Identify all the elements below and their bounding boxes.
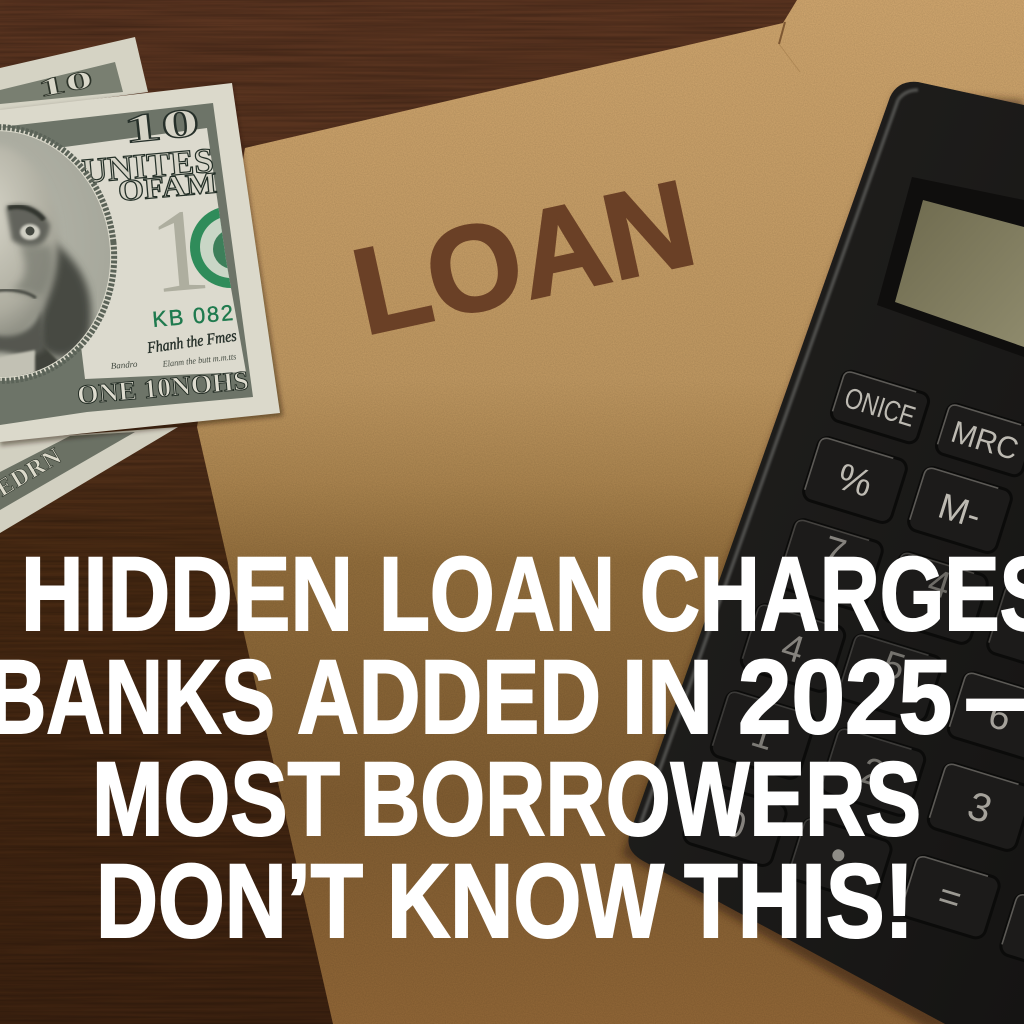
small print: Bandro [110,359,138,371]
hair [36,240,91,357]
coat [17,348,58,376]
eye [20,224,40,240]
title line 2: ADDED [297,639,601,756]
bill interior paper [57,128,246,379]
main dollar bill: Elanm the butt m.m.tts [161,351,237,369]
key: M- [906,465,1014,555]
bill text: UNITES: UNITES [80,141,215,191]
portrait oval frame [0,124,118,384]
bill engraved border [0,103,253,425]
title line 4: DON’T [96,843,363,960]
title line 3: MOST [92,741,340,858]
key: 6: 6 [983,694,1016,740]
signature: Fhanh the Fmes [145,328,238,357]
treasury seal [190,208,231,288]
key: 3: 3 [962,784,997,832]
key: ONICE: ONICE [840,382,919,434]
bottom dollar bills: 10 [36,66,95,103]
calculator [622,82,1024,1024]
title line 1: HIDDEN [21,536,353,653]
title line 2: IN [622,639,713,756]
title line 2 [0,639,1024,756]
title line 4 [96,843,914,960]
display screen [895,200,1024,347]
key: 1: 1 [746,713,779,759]
key: 7 [775,517,885,613]
title line 4: KNOW [387,843,664,960]
key: ONICE [829,369,931,445]
title line 2: 2025 [738,639,952,756]
display bezel [877,177,1024,357]
chin and neck [0,310,45,355]
head [0,145,58,345]
title line 1: LOAN [379,536,615,653]
key: 2: 2 [856,750,889,796]
title line 3 [92,741,921,858]
key: 3 [926,761,1024,853]
key: 6 [946,670,1024,762]
key: 2 [819,726,927,818]
calculator shadow [622,92,1024,1024]
bill watermark numeral: 1 [144,183,215,318]
bill shadow [0,85,283,446]
key: MRC: MRC [947,414,1023,467]
key: equals [898,854,1002,940]
bill numeral 10: 10 [121,99,202,152]
title line 4: THIS! [684,843,914,960]
key: percent [801,435,909,525]
key: percent: % [832,456,877,506]
title line 1 [21,536,1024,653]
calculator edge highlight [640,90,918,825]
nose and cheek shading [12,245,53,296]
key: second row middle: 4 [923,562,956,608]
key: bottom right [998,892,1024,978]
brow and eye socket [6,204,50,247]
key: 0 [681,780,789,868]
heading: LOAN stamp: LOAN [342,154,706,360]
key: 5 [836,632,944,724]
key: 7: 7 [818,529,851,575]
title [0,536,1024,960]
key: 4: 4 [776,626,809,672]
key: equals: = [933,875,967,921]
key: right column upper [985,582,1024,678]
mouth [0,290,36,298]
bottom dollar bills [0,37,178,533]
bill paper [0,83,280,442]
key: 5: 5 [877,643,910,690]
calculator body [628,82,1024,1024]
key: 0: 0 [718,802,751,848]
main dollar bill [0,83,283,446]
key: 1 [709,689,817,781]
key: MRC [934,402,1024,478]
key: second row middle [880,550,990,646]
key: M-: M- [934,485,986,536]
portrait [0,131,110,377]
key: 4 [739,602,847,694]
serial number: KB 082 [151,300,234,332]
key: decimal point [786,816,894,904]
bottom banner text: ONE 10NOHS [76,365,250,410]
bill text: OF AM: OFAM [117,166,218,208]
folder crease [779,22,800,72]
